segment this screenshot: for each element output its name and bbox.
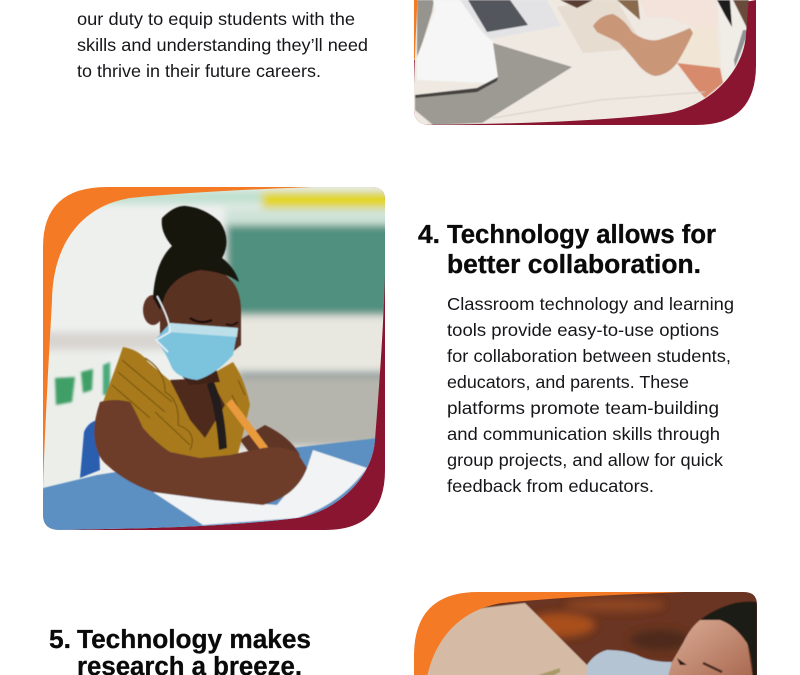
text block: item 3 closing lines bbox=[77, 9, 368, 81]
ear bbox=[143, 295, 163, 325]
item 4 body text: tools provide easy-to-use options bbox=[447, 320, 719, 340]
neck bbox=[182, 370, 220, 384]
item 4 body text: platforms promote team-building bbox=[447, 398, 719, 418]
item 4 body text: feedback from educators. bbox=[447, 476, 654, 496]
item 5 heading bbox=[49, 626, 311, 675]
item 4 body text: and communication skills through bbox=[447, 424, 720, 444]
item 4 body text: Classroom technology and learning bbox=[447, 294, 734, 314]
item 4 body text: for collaboration between students, bbox=[447, 346, 731, 366]
chest and braid bbox=[170, 378, 225, 438]
storage bins bbox=[55, 362, 110, 405]
photo panel: student reading on wooden floor bbox=[414, 592, 757, 675]
item 4 heading: 4. bbox=[418, 221, 440, 249]
chair bbox=[80, 420, 100, 478]
item 4 body text: group projects, and allow for quick bbox=[447, 450, 723, 470]
arm and hand bbox=[94, 400, 307, 505]
item 4 heading bbox=[418, 221, 716, 279]
shirt bbox=[103, 347, 250, 462]
face mask bbox=[155, 323, 238, 380]
item 4 heading: Technology allows for bbox=[447, 221, 716, 249]
item 5 heading: Technology makes bbox=[77, 626, 311, 654]
photo panel: child at laptop with notebook bbox=[400, 0, 760, 125]
head bbox=[159, 269, 242, 352]
pencil bbox=[226, 399, 268, 452]
text block: item 3 closing lines: skills and understanding they’ll need bbox=[77, 35, 368, 55]
item 4 body text: educators, and parents. These bbox=[447, 372, 689, 392]
text block: item 3 closing lines: to thrive in their future careers. bbox=[77, 61, 321, 81]
item 5 heading: 5. bbox=[49, 626, 71, 654]
paper bbox=[153, 450, 367, 525]
photo panel: girl in mask writing at desk bbox=[43, 187, 385, 530]
desk bbox=[43, 438, 376, 530]
hair bbox=[153, 206, 239, 310]
item 4 body text bbox=[447, 294, 734, 496]
text block: item 3 closing lines: our duty to equip students with the bbox=[77, 9, 355, 29]
eyes bbox=[190, 318, 212, 322]
item 4 heading: better collaboration. bbox=[447, 251, 701, 279]
far arm bbox=[240, 424, 300, 456]
